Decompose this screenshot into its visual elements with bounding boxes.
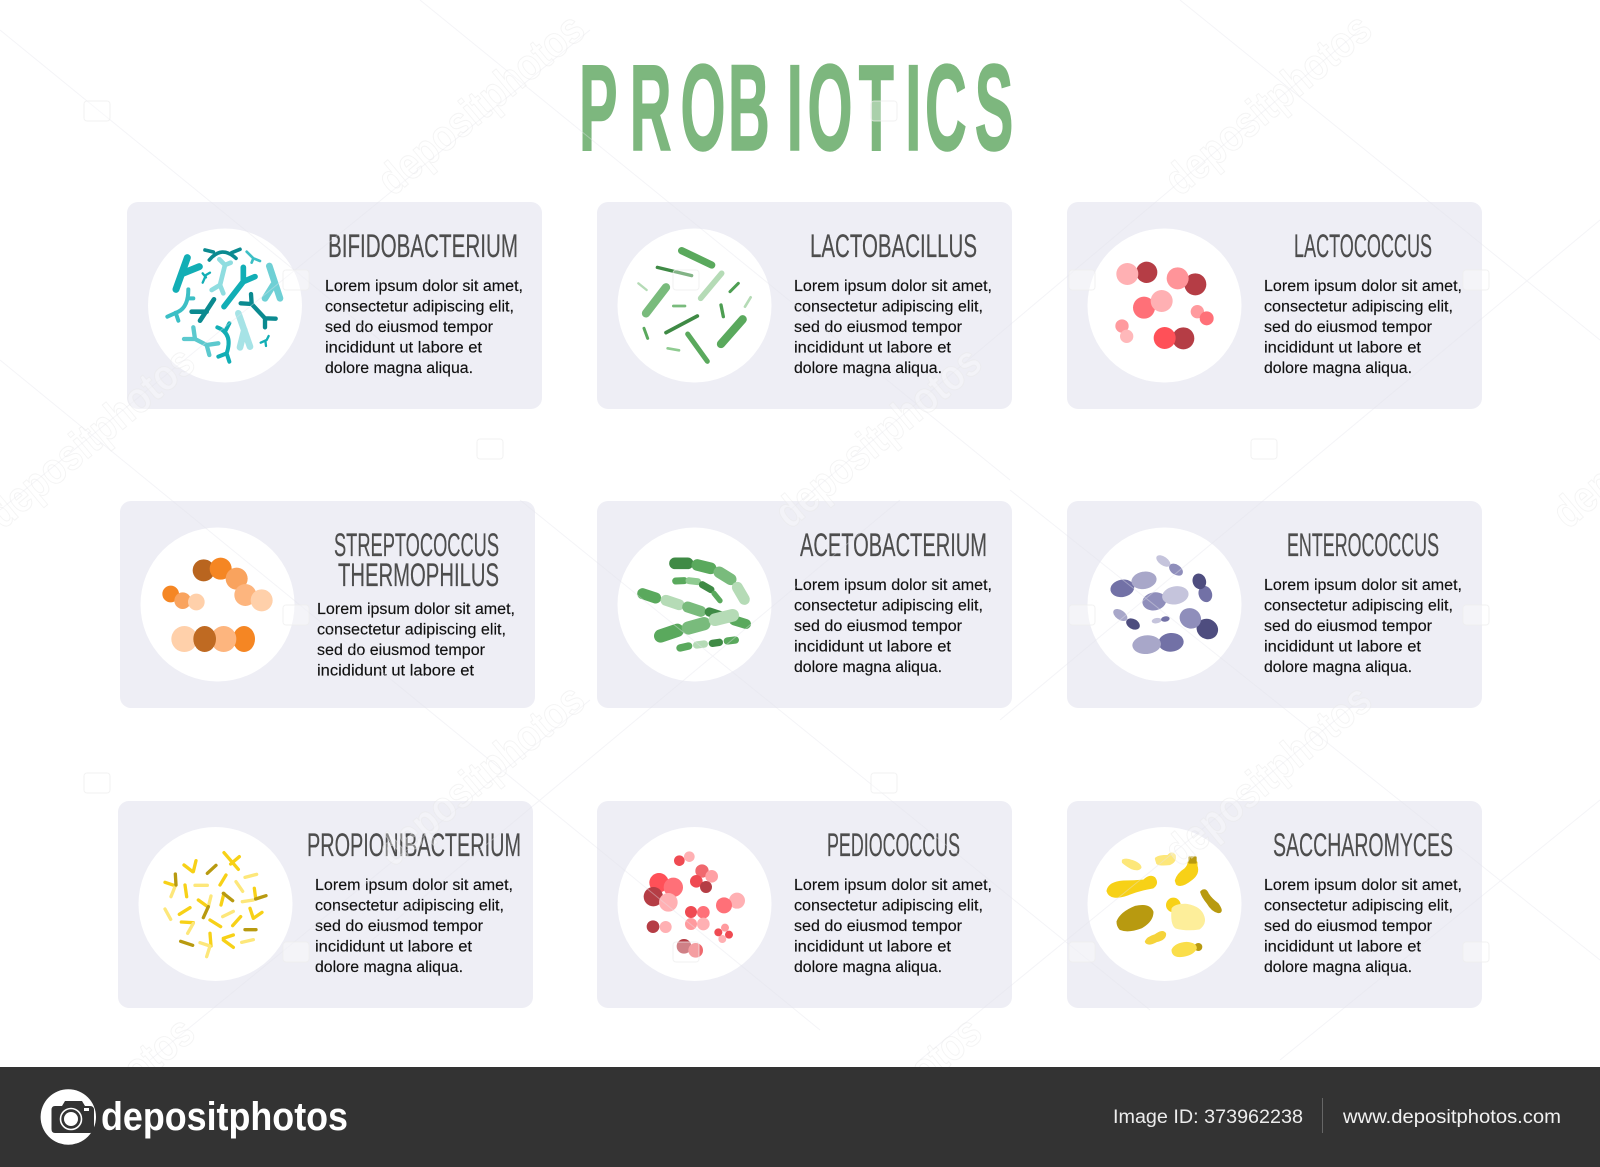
panel: pediococcus: [597, 801, 1012, 1008]
panel: propionibacterium: [118, 801, 533, 1008]
watermark: depositphotos: [1155, 675, 1381, 876]
text block: enterococcus: consectetur adipiscing elit,: [1264, 598, 1453, 614]
text block: saccharomyces: [1264, 877, 1462, 976]
text block: bifidobacterium: sed do eiusmod tempor: [325, 319, 493, 336]
text block: propionibacterium: consectetur adipiscing elit,: [315, 898, 504, 914]
heading: streptococcus thermophilus: STREPTOCOCCUS: [334, 527, 499, 563]
text block: lactobacillus: dolore magna aliqua.: [794, 360, 942, 377]
text block: enterococcus: sed do eiusmod tempor: [1264, 618, 1432, 635]
heading: lactococcus: LACTOCOCCUS: [1294, 228, 1432, 264]
text block: bifidobacterium: incididunt ut labore et: [325, 340, 483, 356]
text block: streptococcus thermophilus: sed do eiusmod tempor: [317, 642, 485, 659]
heading: acetobacterium: ACETOBACTERIUM: [800, 527, 987, 563]
text block: enterococcus: incididunt ut labore et: [1264, 638, 1422, 656]
text block: propionibacterium: incididunt ut labore et: [315, 938, 473, 956]
heading: enterococcus: ENTEROCOCCUS: [1287, 527, 1439, 563]
text block: lactobacillus: [794, 278, 992, 377]
panel: bifidobacterium: [127, 202, 542, 409]
text block: lactobacillus: sed do eiusmod tempor: [794, 319, 962, 336]
icon: propionibacterium cells: [165, 853, 266, 957]
text block: acetobacterium: consectetur adipiscing elit,: [794, 598, 983, 614]
text block: lactobacillus: incididunt ut labore et: [794, 340, 952, 356]
heading: propionibacterium: PROPIONIBACTERIUM: [307, 827, 521, 863]
image id: Image ID: 373962238: [1113, 1106, 1303, 1128]
heading: streptococcus thermophilus: THERMOPHILUS: [338, 557, 499, 593]
text block: propionibacterium: Lorem ipsum dolor sit amet,: [315, 877, 513, 894]
text block: bifidobacterium: Lorem ipsum dolor sit amet,: [325, 278, 523, 295]
text block: lactococcus: sed do eiusmod tempor: [1264, 319, 1432, 336]
text block: pediococcus: sed do eiusmod tempor: [794, 918, 962, 935]
heading: lactobacillus: LACTOBACILLUS: [810, 228, 977, 264]
text block: saccharomyces: dolore magna aliqua.: [1264, 959, 1412, 976]
text block: enterococcus: [1264, 577, 1462, 676]
title: PROBIOTICS: [579, 40, 1013, 177]
icon: lactococcus cells: [1115, 262, 1214, 349]
text block: streptococcus thermophilus: Lorem ipsum dolor sit amet,: [317, 601, 515, 618]
panel: saccharomyces: [1067, 801, 1482, 1008]
heading: pediococcus: PEDIOCOCCUS: [827, 827, 960, 863]
text block: saccharomyces: incididunt ut labore et: [1264, 938, 1422, 956]
panel: acetobacterium: [597, 501, 1012, 708]
text block: pediococcus: consectetur adipiscing elit,: [794, 898, 983, 914]
text block: propionibacterium: dolore magna aliqua.: [315, 959, 463, 976]
panel: lactococcus: [1067, 202, 1482, 409]
text block: bifidobacterium: [325, 278, 523, 377]
text block: lactobacillus: consectetur adipiscing elit,: [794, 298, 983, 316]
icon: bifidobacterium cells: [167, 249, 280, 362]
text block: lactococcus: dolore magna aliqua.: [1264, 360, 1412, 377]
text block: acetobacterium: dolore magna aliqua.: [794, 659, 942, 676]
icon: pediococcus cells: [644, 851, 745, 958]
text block: pediococcus: Lorem ipsum dolor sit amet,: [794, 877, 992, 894]
text block: saccharomyces: consectetur adipiscing elit,: [1264, 898, 1453, 914]
icon: saccharomyces cells: [1108, 854, 1220, 956]
text block: lactobacillus: Lorem ipsum dolor sit amet,: [794, 278, 992, 295]
icon: enterococcus cells: [1109, 553, 1222, 655]
text block: enterococcus: Lorem ipsum dolor sit amet,: [1264, 577, 1462, 594]
text block: streptococcus thermophilus: consectetur adipiscing elit,: [317, 622, 506, 638]
text block: lactococcus: consectetur adipiscing elit,: [1264, 298, 1453, 316]
footer bar: [0, 1067, 1600, 1167]
text block: lactococcus: [1264, 278, 1462, 377]
icon: streptococcus cells: [162, 558, 273, 652]
heading: bifidobacterium: BIFIDOBACTERIUM: [328, 228, 518, 264]
text block: propionibacterium: [315, 877, 513, 976]
icon: acetobacterium chains: [643, 563, 746, 648]
icon: lactobacillus cells: [638, 251, 751, 361]
panel: enterococcus: [1067, 501, 1482, 708]
panel: streptococcus thermophilus: [120, 501, 535, 708]
icon: camera logo: [41, 1089, 96, 1145]
text block: streptococcus thermophilus: incididunt ut labore et: [317, 662, 475, 680]
panel: lactobacillus: [597, 202, 1012, 409]
text block: acetobacterium: [794, 577, 992, 676]
text block: saccharomyces: Lorem ipsum dolor sit amet,: [1264, 877, 1462, 894]
watermark: depositphotos: [368, 675, 594, 876]
text block: bifidobacterium: consectetur adipiscing elit,: [325, 298, 514, 316]
text block: bifidobacterium: dolore magna aliqua.: [325, 360, 473, 377]
text block: pediococcus: dolore magna aliqua.: [794, 959, 942, 976]
heading: saccharomyces: SACCHAROMYCES: [1273, 827, 1453, 863]
text block: saccharomyces: sed do eiusmod tempor: [1264, 918, 1432, 935]
website url: www.depositphotos.com: [1342, 1106, 1561, 1128]
text block: pediococcus: incididunt ut labore et: [794, 938, 952, 956]
heading: streptococcus thermophilus: [334, 527, 499, 593]
text block: acetobacterium: sed do eiusmod tempor: [794, 618, 962, 635]
text block: propionibacterium: sed do eiusmod tempor: [315, 918, 483, 935]
logo wordmark: depositphotos: [101, 1095, 348, 1139]
text block: streptococcus thermophilus: [317, 601, 515, 680]
text block: enterococcus: dolore magna aliqua.: [1264, 659, 1412, 676]
watermark: depositphotos: [765, 337, 991, 538]
text block: acetobacterium: incididunt ut labore et: [794, 638, 952, 656]
text block: acetobacterium: Lorem ipsum dolor sit amet,: [794, 577, 992, 594]
text block: lactococcus: incididunt ut labore et: [1264, 340, 1422, 356]
text block: lactococcus: Lorem ipsum dolor sit amet,: [1264, 278, 1462, 295]
text block: pediococcus: [794, 877, 992, 976]
